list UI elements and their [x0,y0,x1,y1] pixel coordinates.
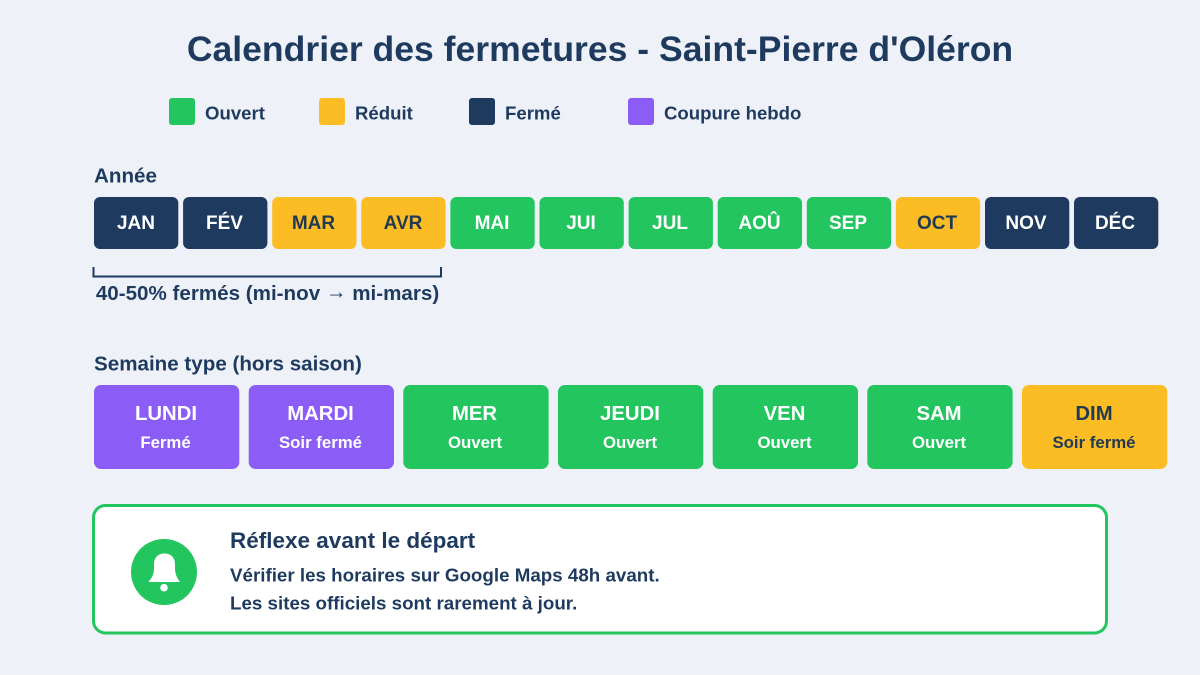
title: Calendrier des fermetures - Saint-Pierre d'Oléron [187,29,1013,69]
day: lundi [94,385,239,469]
day: mercredi: Ouvert [448,433,502,452]
legend: coupure hebdo [628,98,801,125]
day: mardi: Soir fermé [279,433,362,452]
day: lundi: LUNDI [135,403,197,425]
month: octobre: OCT [917,213,957,234]
month: mars [272,197,356,249]
month: mai: MAI [475,213,509,234]
heading: semaine type: Semaine type (hors saison) [94,353,362,376]
day: dimanche [1022,385,1167,469]
callout: réflexe avant le départ [94,506,1106,633]
day: vendredi: Ouvert [757,433,812,452]
callout text: Vérifier les horaires sur Google Maps 48h avant. [230,564,660,586]
month: août: AOÛ [738,212,781,234]
day: mercredi: MER [452,403,497,425]
month: avril: AVR [384,213,423,234]
day: mardi: MARDI [287,403,354,425]
day: jeudi: JEUDI [600,403,660,425]
day: samedi: SAM [916,403,962,425]
legend [169,98,801,125]
legend: réduit: Réduit [355,102,413,124]
month: mai [450,197,535,249]
month calendar [94,197,1158,249]
month: octobre [896,197,980,249]
weekly schedule [94,385,1167,469]
month: juin: JUI [566,213,596,234]
callout text [230,564,660,614]
legend: coupure hebdo: Coupure hebdo [664,102,801,124]
legend: réduit [319,98,413,125]
day: samedi [867,385,1013,469]
month: décembre [1074,197,1158,249]
month: avril [361,197,446,249]
day: jeudi [558,385,703,469]
callout text: Les sites officiels sont rarement à jour. [230,592,577,614]
legend: fermé: Fermé [505,102,561,124]
bracket label: 40-50% fermés (mi-nov [96,282,320,305]
day: vendredi: VEN [764,403,805,425]
month: juillet: JUL [652,213,688,234]
day: samedi: Ouvert [912,433,966,452]
month: novembre: NOV [1005,213,1047,234]
heading: année: Année [94,165,157,188]
month: juillet [629,197,713,249]
month: janvier: JAN [117,213,155,234]
month: février [183,197,267,249]
month: janvier [94,197,178,249]
day: mardi [249,385,394,469]
bracket label: mi-mars) [346,282,439,305]
day: mercredi [403,385,549,469]
icon: bell [131,539,197,605]
day: lundi: Fermé [140,433,191,452]
month: novembre [985,197,1069,249]
month: décembre: DÉC [1095,212,1135,234]
day: jeudi: Ouvert [603,433,657,452]
month: septembre [807,197,891,249]
legend: ouvert: Ouvert [205,102,265,124]
legend: ouvert [169,98,265,125]
day: vendredi [713,385,858,469]
month: mars: MAR [292,213,335,234]
bracket label: → [326,280,346,304]
day: dimanche: DIM [1075,403,1113,425]
month: février: FÉV [206,212,243,234]
bracket: closure span [94,267,441,276]
legend: fermé [469,98,561,125]
month: août [718,197,802,249]
month: septembre: SEP [829,213,867,234]
day: dimanche: Soir fermé [1052,433,1136,452]
month: juin [540,197,624,249]
callout heading: Réflexe avant le départ [230,528,476,553]
